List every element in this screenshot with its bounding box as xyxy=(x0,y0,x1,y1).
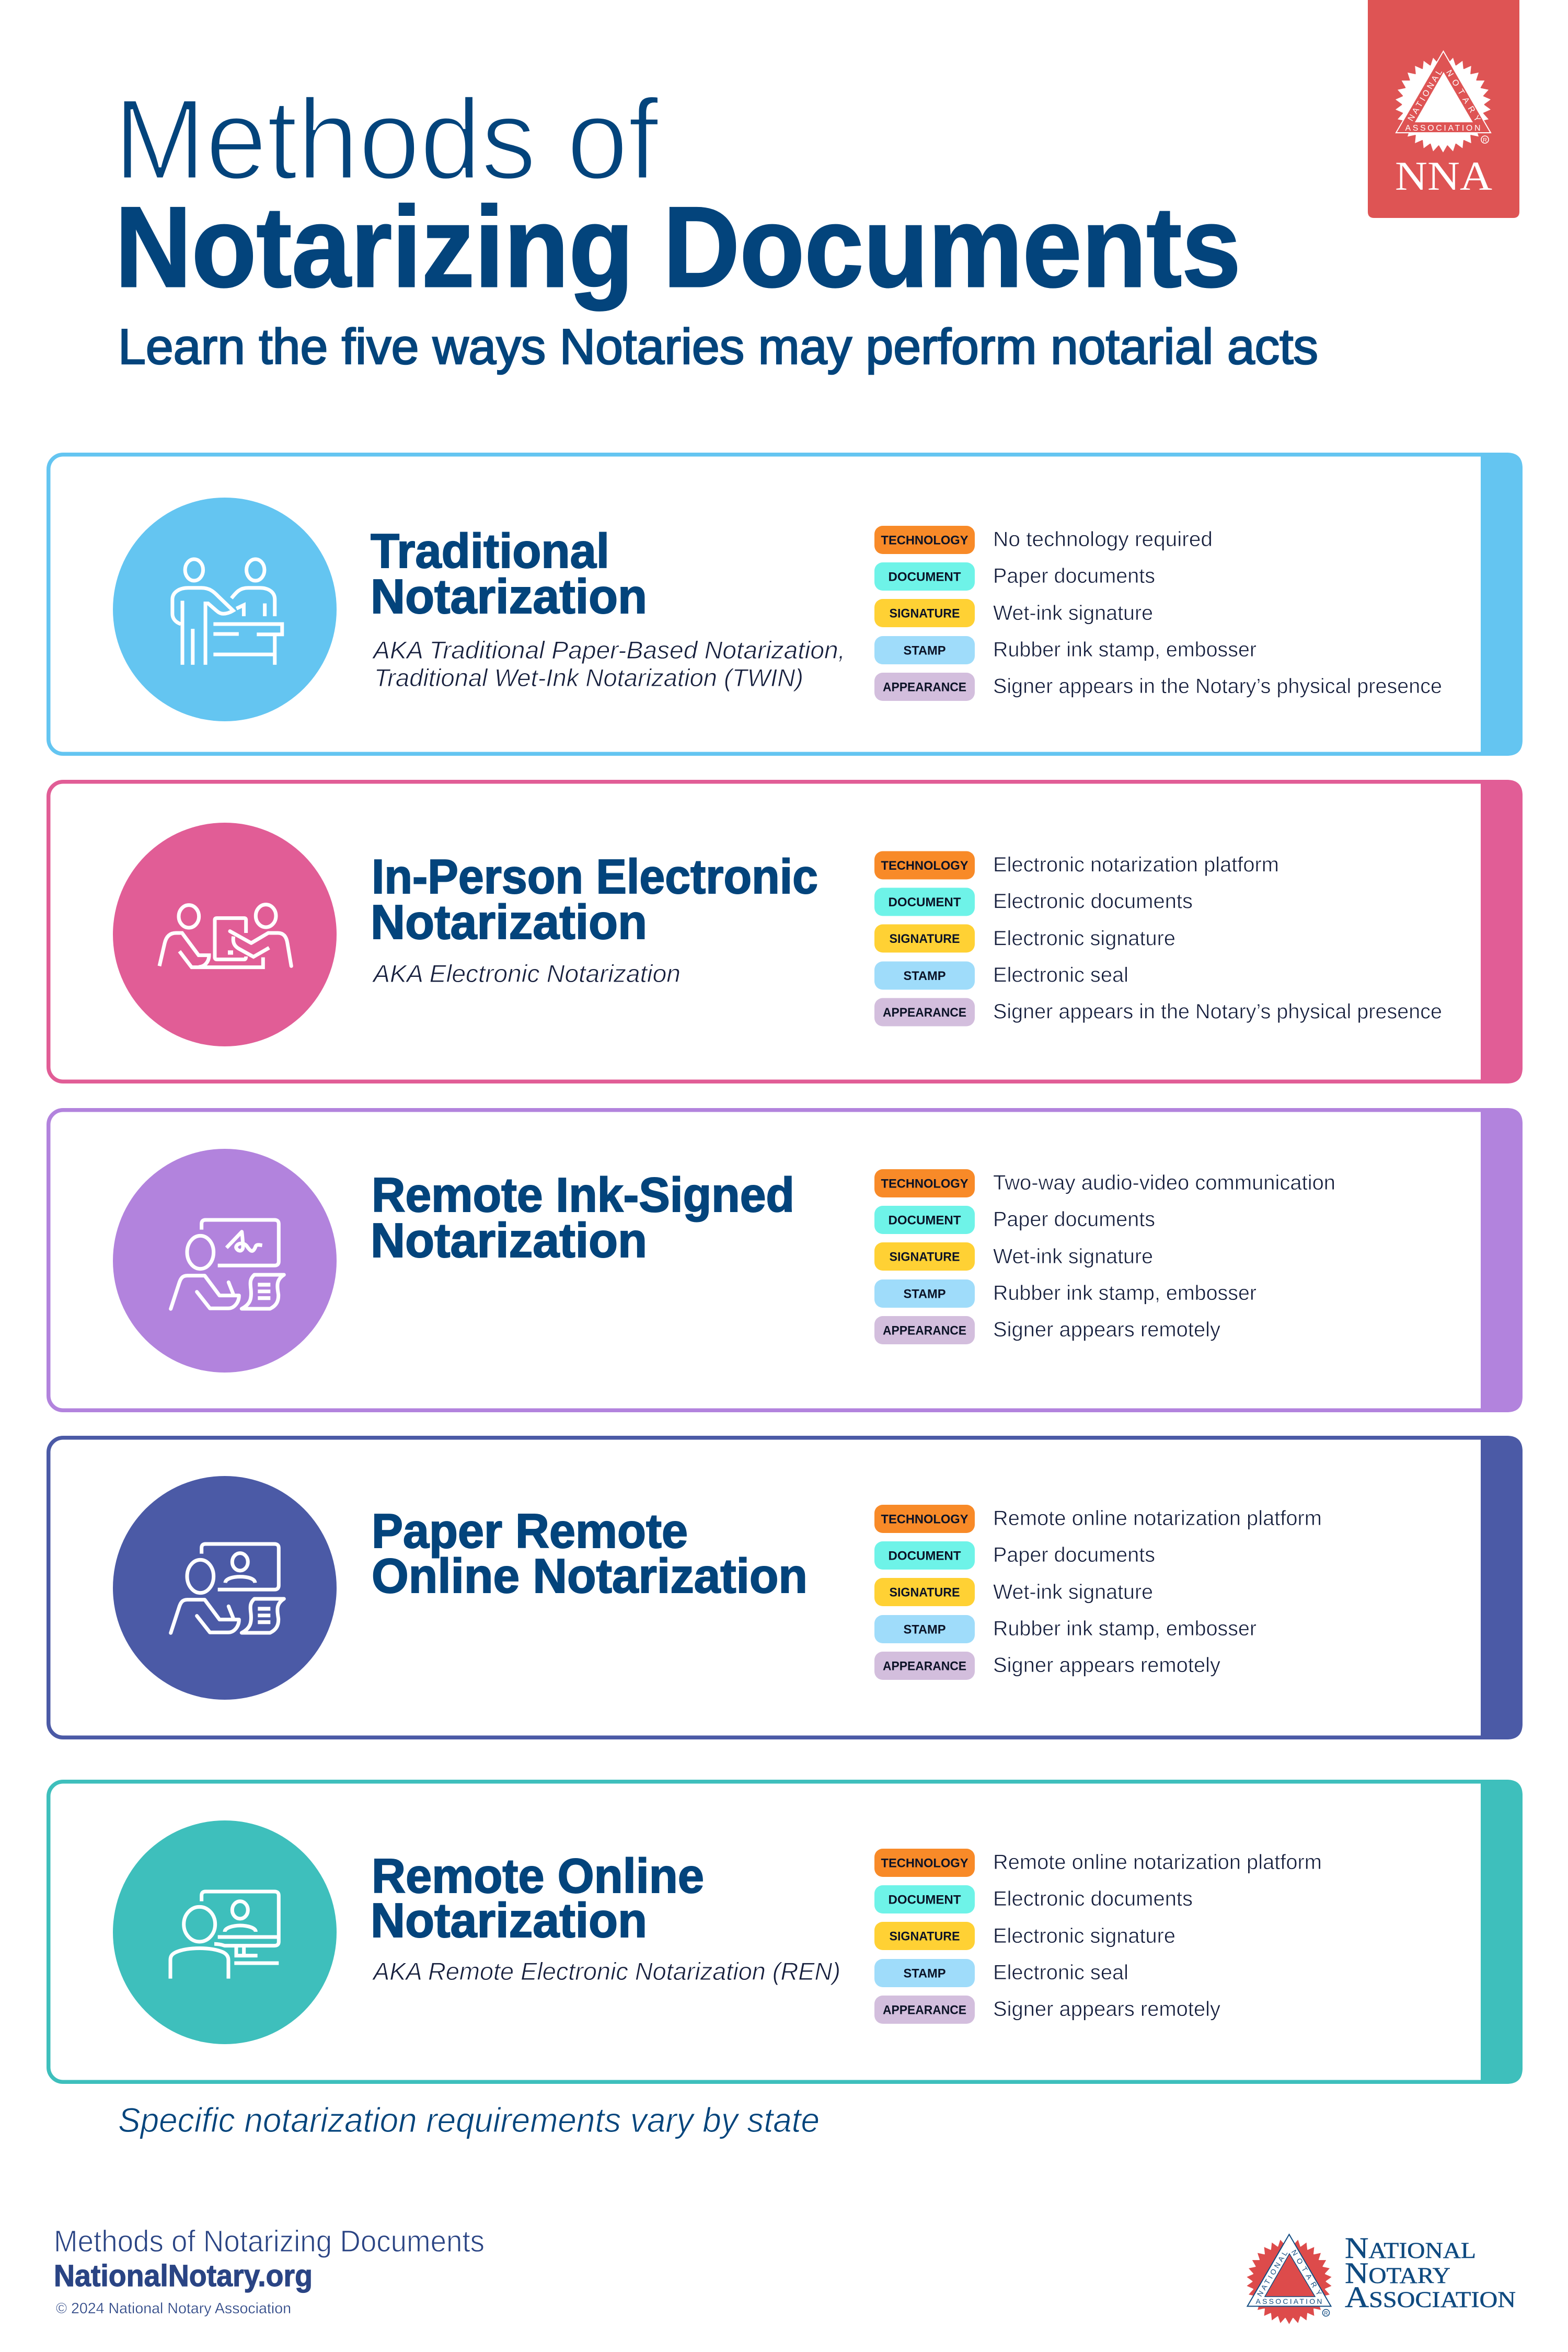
heading: In-Person Electronic xyxy=(372,849,818,904)
footer logo: National Notary Association: ASSOCIATION xyxy=(1255,2297,1322,2305)
attribute rows: TECHNOLOGY xyxy=(881,533,968,548)
attribute rows: Wet-ink signature xyxy=(993,1245,1153,1268)
attribute rows: STAMP xyxy=(903,644,946,658)
aka text: Traditional Wet-Ink Notarization (TWIN) xyxy=(374,664,803,691)
heading xyxy=(371,524,647,624)
heading: Notarization xyxy=(371,1893,647,1947)
title: Methods of xyxy=(114,76,659,203)
aka text: AKA Traditional Paper-Based Notarization, xyxy=(372,636,845,664)
attribute rows: Paper documents xyxy=(993,1208,1155,1231)
attribute rows xyxy=(874,526,1442,701)
attribute rows: APPEARANCE xyxy=(883,2003,966,2017)
icon: red seal xyxy=(1233,2228,1332,2337)
attribute rows: TECHNOLOGY xyxy=(881,1513,968,1526)
footer text: © 2024 National Notary Association xyxy=(56,2300,291,2317)
footer logo: National Notary Association: R xyxy=(1324,2311,1328,2316)
heading xyxy=(371,1168,794,1267)
aka text xyxy=(372,636,845,691)
attribute rows: Rubber ink stamp, embosser xyxy=(993,1617,1256,1640)
attribute rows: Electronic signature xyxy=(993,927,1175,950)
heading: Notarization xyxy=(371,895,647,949)
attribute rows: Paper documents xyxy=(993,1543,1155,1566)
heading: Notarization xyxy=(371,1213,647,1267)
heading: Paper Remote xyxy=(372,1504,688,1558)
attribute rows: DOCUMENT xyxy=(889,1893,961,1907)
title xyxy=(114,76,1241,311)
logo badge: NNA top right: NNA xyxy=(1395,153,1492,199)
attribute rows: APPEARANCE xyxy=(883,1323,966,1338)
icon: notary and signer at a desk xyxy=(172,559,282,665)
attribute rows: Paper documents xyxy=(993,564,1155,587)
attribute rows: SIGNATURE xyxy=(890,932,960,946)
attribute rows: Signer appears in the Notary’s physical presence xyxy=(993,1000,1442,1023)
attribute rows: TECHNOLOGY xyxy=(881,859,968,873)
attribute rows: APPEARANCE xyxy=(883,681,966,694)
attribute rows xyxy=(874,1169,1335,1344)
attribute rows: APPEARANCE xyxy=(883,1006,966,1020)
attribute rows: TECHNOLOGY xyxy=(881,1177,968,1191)
logo badge: NNA top right: NOTARY xyxy=(1444,68,1482,123)
attribute rows: Signer appears remotely xyxy=(993,1318,1220,1341)
attribute rows: Two-way audio-video communication xyxy=(993,1171,1335,1194)
attribute rows: STAMP xyxy=(903,1287,946,1301)
attribute rows: DOCUMENT xyxy=(889,570,961,584)
icon: signer with person on screen and paper xyxy=(171,1544,284,1633)
attribute rows: DOCUMENT xyxy=(889,895,961,909)
attribute rows: Remote online notarization platform xyxy=(993,1851,1322,1874)
attribute rows: Electronic seal xyxy=(993,1961,1128,1984)
footer logo: National Notary Association: ASSOCIATION xyxy=(1345,2281,1516,2314)
panel: In-Person Electronic Notarization xyxy=(49,780,1523,1083)
attribute rows: STAMP xyxy=(903,1966,946,1981)
logo badge: NNA top right: R xyxy=(1483,137,1487,143)
attribute rows: Wet-ink signature xyxy=(993,1581,1153,1604)
panel: Traditional Notarization xyxy=(49,453,1523,756)
panel: Remote Online Notarization xyxy=(49,1780,1523,2084)
logo badge: NNA top right: ASSOCIATION xyxy=(1405,124,1480,133)
attribute rows xyxy=(874,851,1442,1027)
attribute rows xyxy=(874,1849,1322,2024)
aka text: AKA Electronic Notarization xyxy=(372,960,681,987)
heading: Traditional xyxy=(371,524,609,578)
attribute rows xyxy=(874,1505,1322,1680)
heading: Notarization xyxy=(371,569,647,624)
attribute rows: Electronic documents xyxy=(993,1887,1193,1910)
icon: signer with a signature on screen xyxy=(171,1220,284,1309)
footer logo: National Notary Association xyxy=(1233,2228,1516,2337)
subtitle: Learn the five ways Notaries may perform notarial acts xyxy=(118,319,1318,375)
attribute rows: Electronic notarization platform xyxy=(993,853,1279,876)
heading xyxy=(372,1504,808,1603)
attribute rows: Electronic signature xyxy=(993,1924,1175,1947)
attribute rows: Rubber ink stamp, embosser xyxy=(993,638,1256,661)
heading: Remote Online xyxy=(372,1849,704,1903)
attribute rows: Signer appears remotely xyxy=(993,1654,1220,1677)
aka text: AKA Remote Electronic Notarization (REN) xyxy=(372,1957,840,1985)
title: Notarizing Documents xyxy=(115,183,1241,311)
footer logo: National Notary Association: NATIONAL xyxy=(1345,2232,1476,2265)
attribute rows: STAMP xyxy=(903,1622,946,1637)
heading xyxy=(371,1849,704,1947)
icon: white seal xyxy=(1380,45,1491,168)
attribute rows: Rubber ink stamp, embosser xyxy=(993,1282,1256,1305)
footer text: NationalNotary.org xyxy=(54,2259,313,2293)
attribute rows: STAMP xyxy=(903,969,946,983)
state requirements note: Specific notarization requirements vary by state xyxy=(118,2101,820,2139)
logo badge: NNA top right xyxy=(1368,0,1519,218)
attribute rows: SIGNATURE xyxy=(890,1586,960,1599)
footer logo: National Notary Association: NOTARY xyxy=(1290,2248,1324,2297)
heading xyxy=(371,849,818,949)
attribute rows: Electronic documents xyxy=(993,890,1193,913)
attribute rows: Remote online notarization platform xyxy=(993,1507,1322,1530)
icon: person facing monitor with person on screen xyxy=(170,1892,279,1979)
attribute rows: DOCUMENT xyxy=(889,1549,961,1563)
attribute rows: Signer appears remotely xyxy=(993,1998,1220,2021)
heading: Remote Ink-Signed xyxy=(372,1168,794,1222)
attribute rows: APPEARANCE xyxy=(883,1659,966,1674)
icon: two people with a tablet xyxy=(159,905,291,967)
attribute rows: DOCUMENT xyxy=(889,1214,961,1227)
footer text: Methods of Notarizing Documents xyxy=(54,2224,485,2258)
heading: Online Notarization xyxy=(372,1549,808,1603)
attribute rows: Electronic seal xyxy=(993,964,1128,987)
attribute rows: SIGNATURE xyxy=(890,1250,960,1264)
footer text xyxy=(54,2224,485,2317)
footer logo: National Notary Association: NATIONAL xyxy=(1255,2249,1289,2298)
attribute rows: SIGNATURE xyxy=(890,1930,960,1943)
attribute rows: No technology required xyxy=(993,528,1213,551)
attribute rows: Signer appears in the Notary’s physical presence xyxy=(993,675,1442,698)
panel: Paper Remote Online Notarization xyxy=(49,1436,1523,1739)
attribute rows: TECHNOLOGY xyxy=(881,1857,968,1870)
attribute rows: Wet-ink signature xyxy=(993,602,1153,625)
footer logo: National Notary Association: NOTARY xyxy=(1345,2257,1450,2290)
logo badge: NNA top right: NATIONAL xyxy=(1406,68,1444,123)
panel: Remote Ink-Signed Notarization xyxy=(49,1108,1523,1412)
attribute rows: SIGNATURE xyxy=(890,606,960,621)
